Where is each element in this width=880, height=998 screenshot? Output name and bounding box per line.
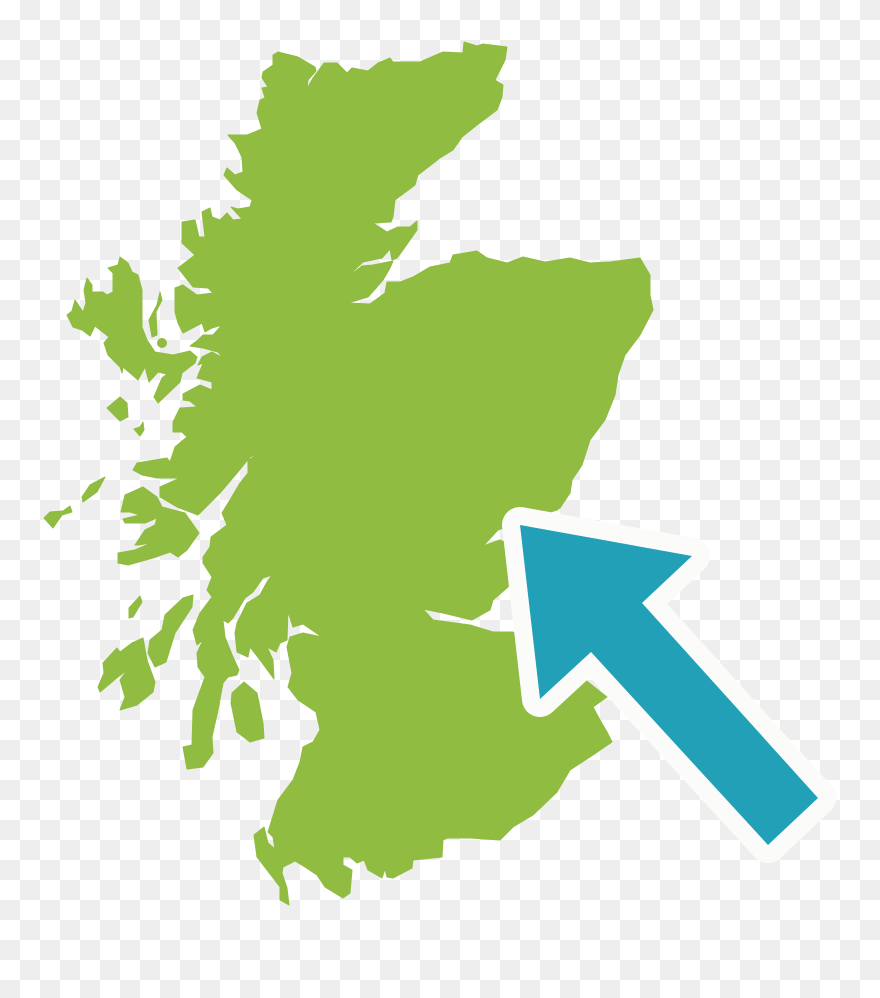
island: Skye bbox=[67, 257, 197, 403]
mainland bbox=[133, 42, 653, 905]
island: Coll bbox=[82, 477, 105, 502]
island: Islay bbox=[98, 638, 155, 710]
island: Scalpay bbox=[158, 338, 166, 348]
island: Colonsay bbox=[129, 596, 142, 618]
map of Scotland bbox=[44, 42, 653, 905]
arrow white outline bbox=[520, 525, 818, 845]
island: Arran bbox=[231, 682, 264, 742]
island: Raasay bbox=[149, 292, 162, 337]
arrow blue body bbox=[520, 525, 818, 845]
island: Tiree bbox=[44, 506, 72, 528]
island: Rum bbox=[107, 397, 128, 421]
arrow pointing to the east coast bbox=[520, 525, 818, 845]
island: Eigg bbox=[134, 422, 144, 436]
island: Jura bbox=[148, 595, 193, 667]
island: Mull bbox=[118, 487, 199, 565]
